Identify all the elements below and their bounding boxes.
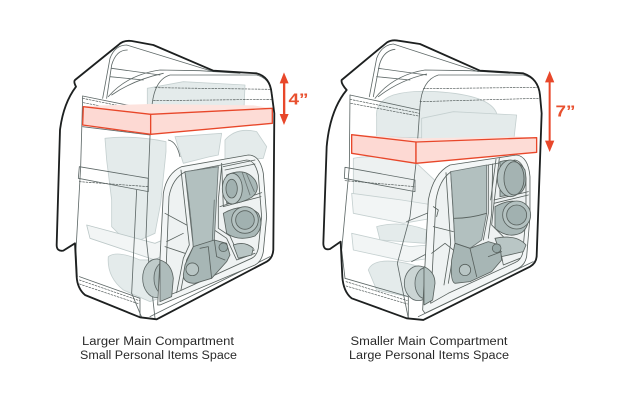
- camera body: [183, 240, 230, 283]
- bag body fill: [323, 40, 542, 320]
- caption: right backpack: [349, 336, 509, 362]
- pouch frame outer: [423, 155, 530, 313]
- middle lens: [223, 207, 261, 238]
- contents: flap panel: [87, 225, 187, 260]
- icon: height arrow: [545, 71, 554, 152]
- upper lens: [500, 160, 526, 197]
- camera body: [451, 242, 502, 283]
- pouch frame inner: [431, 160, 526, 303]
- water bottle: [451, 165, 487, 248]
- caption: left backpack: Larger Main Compartment: [82, 336, 235, 348]
- caption: left backpack: [80, 336, 237, 362]
- contents: upper bags and folders: [352, 91, 517, 300]
- caption: right backpack: Smaller Main Compartment: [350, 336, 508, 348]
- contents: laptops and folders: [105, 82, 267, 302]
- panel: camera pouch: [423, 155, 531, 313]
- contents: lower lens: [143, 259, 174, 298]
- lens cap: [233, 243, 253, 258]
- contents: lower lens: [404, 266, 435, 301]
- pouch frame inner: [165, 160, 262, 297]
- pouch dividers: [177, 170, 193, 293]
- interior lines: pack construction: [76, 45, 272, 318]
- stitching: [345, 87, 538, 304]
- stitching: [79, 88, 272, 304]
- label: 4 inch height: 4”: [288, 92, 308, 108]
- interior lines: pack construction: [342, 44, 540, 318]
- label: 7 inch height: 7”: [556, 104, 576, 120]
- caption: left backpack: Small Personal Items Space: [80, 350, 237, 362]
- panel: smaller main compartment backpack: [323, 40, 554, 320]
- highlight: red compartment band: [83, 104, 272, 134]
- middle lens: [495, 201, 528, 235]
- upper lens: [227, 172, 257, 204]
- pouch frame outer: [158, 155, 267, 305]
- icon: height arrow: [280, 72, 289, 125]
- camera dials: [186, 263, 199, 276]
- pouch dividers: [444, 172, 455, 285]
- panel: camera pouch: [158, 155, 267, 305]
- camera dials: [459, 264, 471, 276]
- bag outer outline: [323, 40, 542, 320]
- panel: larger main compartment backpack: [57, 41, 289, 319]
- lower lens overlap: [160, 260, 173, 302]
- lower lens overlap: [424, 267, 435, 305]
- highlight: red compartment band: [352, 135, 537, 163]
- lens cap: [495, 237, 526, 257]
- bag body fill: [57, 41, 274, 319]
- bag outer outline: [57, 41, 274, 319]
- water bottle: [185, 167, 218, 248]
- caption: right backpack: Large Personal Items Space: [349, 350, 509, 362]
